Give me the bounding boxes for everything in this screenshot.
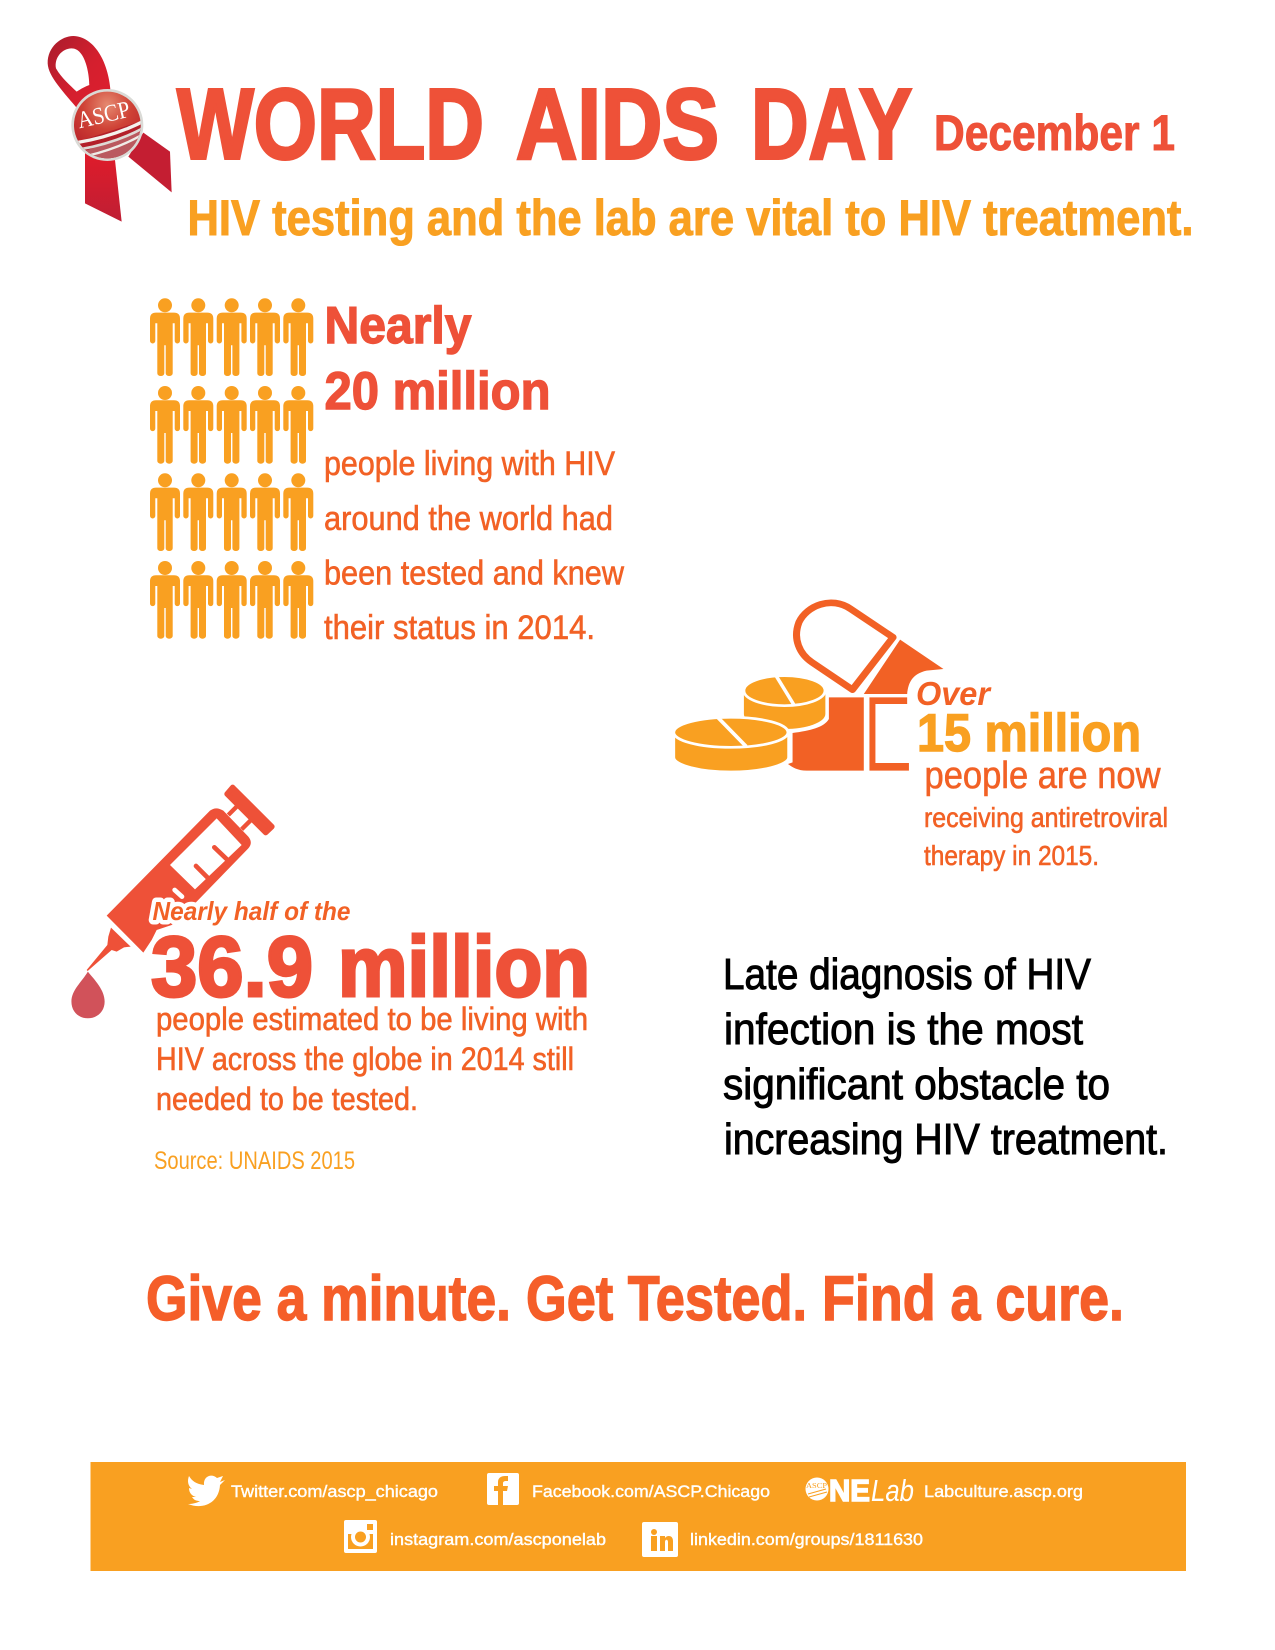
logo: ONE Lab [806, 1473, 914, 1508]
panel: 36.9 million untested [71, 787, 590, 1175]
icon: syringe with blood drop [71, 787, 272, 1018]
stat heading: 36.9 million: million [338, 920, 590, 1015]
call to action: Find a cure. [822, 1264, 1124, 1334]
stat description: HIV across the globe in 2014 still [156, 1041, 574, 1077]
callout: late diagnosis: infection is the most [724, 1005, 1083, 1054]
stat description: people are now [924, 755, 1161, 797]
stat heading: Nearly 20 million [324, 297, 550, 421]
stat description: therapy in 2015. [924, 840, 1099, 871]
stat heading: Over 15 million: Over [916, 675, 992, 712]
logo: ONE Lab: NE [829, 1473, 870, 1508]
callout: late diagnosis: significant obstacle to [723, 1060, 1110, 1109]
stat description [924, 755, 1168, 871]
stat description: around the world had [324, 500, 613, 538]
stat description: needed to be tested. [156, 1081, 418, 1117]
instagram link [344, 1520, 606, 1553]
stat description: receiving antiretroviral [924, 802, 1168, 833]
icon: twitter bird [188, 1476, 225, 1506]
facebook link [487, 1473, 770, 1505]
twitter link [188, 1476, 438, 1506]
title: WORLD [177, 68, 484, 180]
icon: grid of people [150, 298, 313, 639]
logo: ONE Lab: ASCP [806, 1482, 827, 1490]
stat description: their status in 2014. [324, 609, 595, 647]
title: DAY [751, 68, 912, 180]
logo: ONE Lab: Lab [871, 1473, 914, 1508]
icon: red ribbon with ASCP badge: ASCP [75, 97, 133, 134]
stat description: been tested and knew [324, 554, 624, 592]
call to action: Give a minute. [146, 1264, 511, 1334]
twitter link: Twitter.com/ascp_chicago [231, 1482, 438, 1501]
callout: late diagnosis: increasing HIV treatment. [724, 1115, 1168, 1164]
stat heading: 36.9 million: 36.9 [151, 920, 313, 1015]
icon: red ribbon with ASCP badge [48, 36, 172, 222]
panel: 20 million tested [150, 297, 624, 647]
stat heading: 36.9 million [151, 920, 590, 1015]
source: Source: UNAIDS 2015 [154, 1147, 355, 1175]
icon: linkedin [642, 1522, 678, 1557]
one lab link: Labculture.ascp.org [924, 1482, 1083, 1501]
icon: facebook [487, 1473, 519, 1505]
facebook link: Facebook.com/ASCP.Chicago [532, 1482, 770, 1501]
stat description [156, 1001, 588, 1117]
one lab link [806, 1473, 1083, 1508]
callout: late diagnosis: Late diagnosis of HIV [723, 950, 1092, 999]
footer bar [90, 1462, 1186, 1571]
icon: capsule and tablets [673, 603, 943, 772]
date: December 1 [934, 105, 1175, 161]
call to action: Get Tested. [526, 1264, 807, 1334]
panel: social footer [90, 1462, 1186, 1571]
callout: late diagnosis [723, 950, 1168, 1164]
linkedin link: linkedin.com/groups/1811630 [690, 1530, 923, 1549]
linkedin link [642, 1522, 923, 1557]
title: AIDS [516, 68, 719, 180]
instagram link: instagram.com/ascponelab [390, 1530, 606, 1549]
stat description: people living with HIV [324, 445, 615, 483]
stat description: people estimated to be living with [156, 1001, 588, 1037]
stat heading: Over 15 million [916, 675, 1141, 763]
call to action [146, 1264, 1124, 1334]
stat heading: Nearly 20 million: Nearly [324, 297, 472, 355]
stat heading: Nearly 20 million: 20 million [324, 362, 550, 421]
stat lead-in: Nearly half of the [152, 896, 350, 926]
panel: 15 million on therapy [673, 603, 1168, 871]
title [177, 68, 912, 180]
stat heading: Over 15 million: 15 million [917, 704, 1141, 763]
icon: instagram [344, 1520, 377, 1553]
stat description [324, 445, 624, 647]
